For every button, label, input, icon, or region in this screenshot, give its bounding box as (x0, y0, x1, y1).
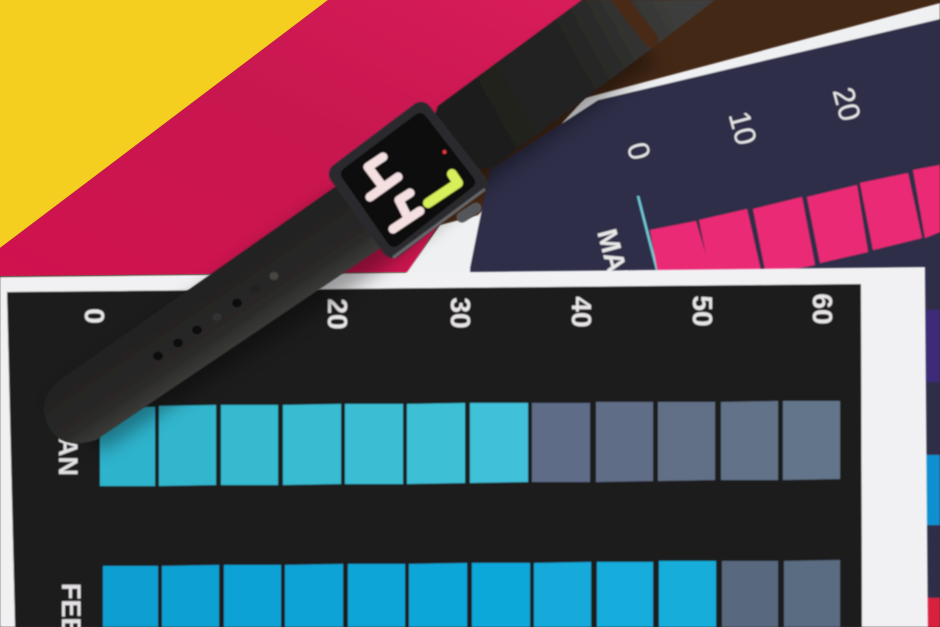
poster navy background (465, 19, 940, 627)
upper watch strap (430, 0, 715, 170)
poster side colour blocks (926, 310, 940, 627)
poster white border (405, 3, 940, 300)
strap holes (153, 272, 278, 360)
sheet paper (0, 267, 928, 627)
tick 0: 0 (79, 308, 110, 324)
white chart sheet (0, 267, 928, 627)
watch screen digits (368, 157, 420, 229)
tick 60: 60 (807, 293, 838, 325)
case lower highlight (394, 190, 484, 257)
strap slit (617, 0, 651, 40)
lime activity digit (428, 174, 458, 203)
watch case (340, 113, 476, 247)
tick 50: 50 (687, 295, 718, 327)
smartwatch (44, 0, 715, 443)
January bar row (100, 401, 840, 486)
tick 20: 20 (322, 298, 353, 330)
row label January: JAN (53, 422, 83, 476)
yellow paper (0, 0, 328, 248)
red indicator dot (442, 150, 446, 154)
poster axis numbers (620, 84, 866, 164)
lower watch strap (44, 180, 400, 443)
watch glass (348, 120, 468, 240)
watch shadow (50, 15, 660, 452)
digital crown (462, 208, 476, 217)
second digit (393, 193, 420, 229)
poster tick 20: 20 (826, 84, 866, 125)
poster tick 0: 0 (620, 139, 656, 164)
axis numbers (79, 293, 838, 330)
poster tick 10: 10 (722, 108, 762, 149)
tick 40: 40 (566, 296, 597, 328)
navy chart poster (405, 3, 940, 627)
poster row label: MAR (591, 226, 638, 295)
tick 30: 30 (445, 297, 476, 329)
crimson paper (0, 0, 582, 276)
poster axis line (638, 196, 657, 270)
first digit (368, 157, 398, 197)
sheet black chart panel (7, 284, 862, 627)
February bar row (103, 560, 840, 627)
poster pink bars (650, 165, 940, 275)
